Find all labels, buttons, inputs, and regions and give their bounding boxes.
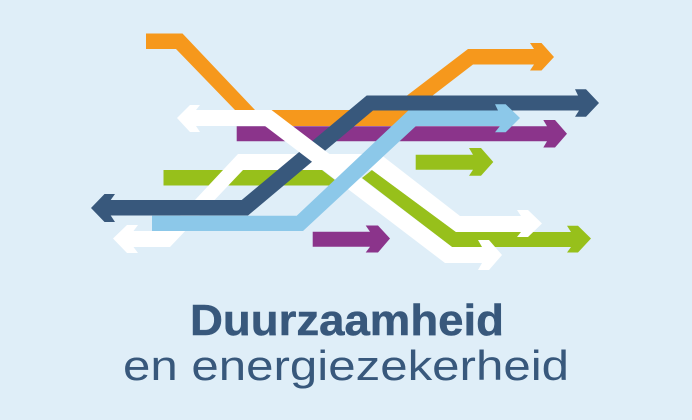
arrow: purple upper (237, 120, 567, 148)
arrow: orange (146, 34, 554, 126)
arrow: green short (416, 148, 493, 176)
arrow: white upper left to right (177, 105, 502, 270)
arrow network (91, 34, 599, 270)
title: Duurzaamheid (190, 296, 504, 345)
arrow: dark blue (91, 89, 599, 222)
arrow: purple lower (313, 226, 390, 252)
arrow: green right part (362, 170, 591, 252)
arrow: green left part (164, 170, 335, 186)
subtitle: en energiezekerheid (123, 342, 569, 389)
arrow: light blue (152, 104, 520, 231)
arrow: white lower left to right (113, 154, 542, 253)
